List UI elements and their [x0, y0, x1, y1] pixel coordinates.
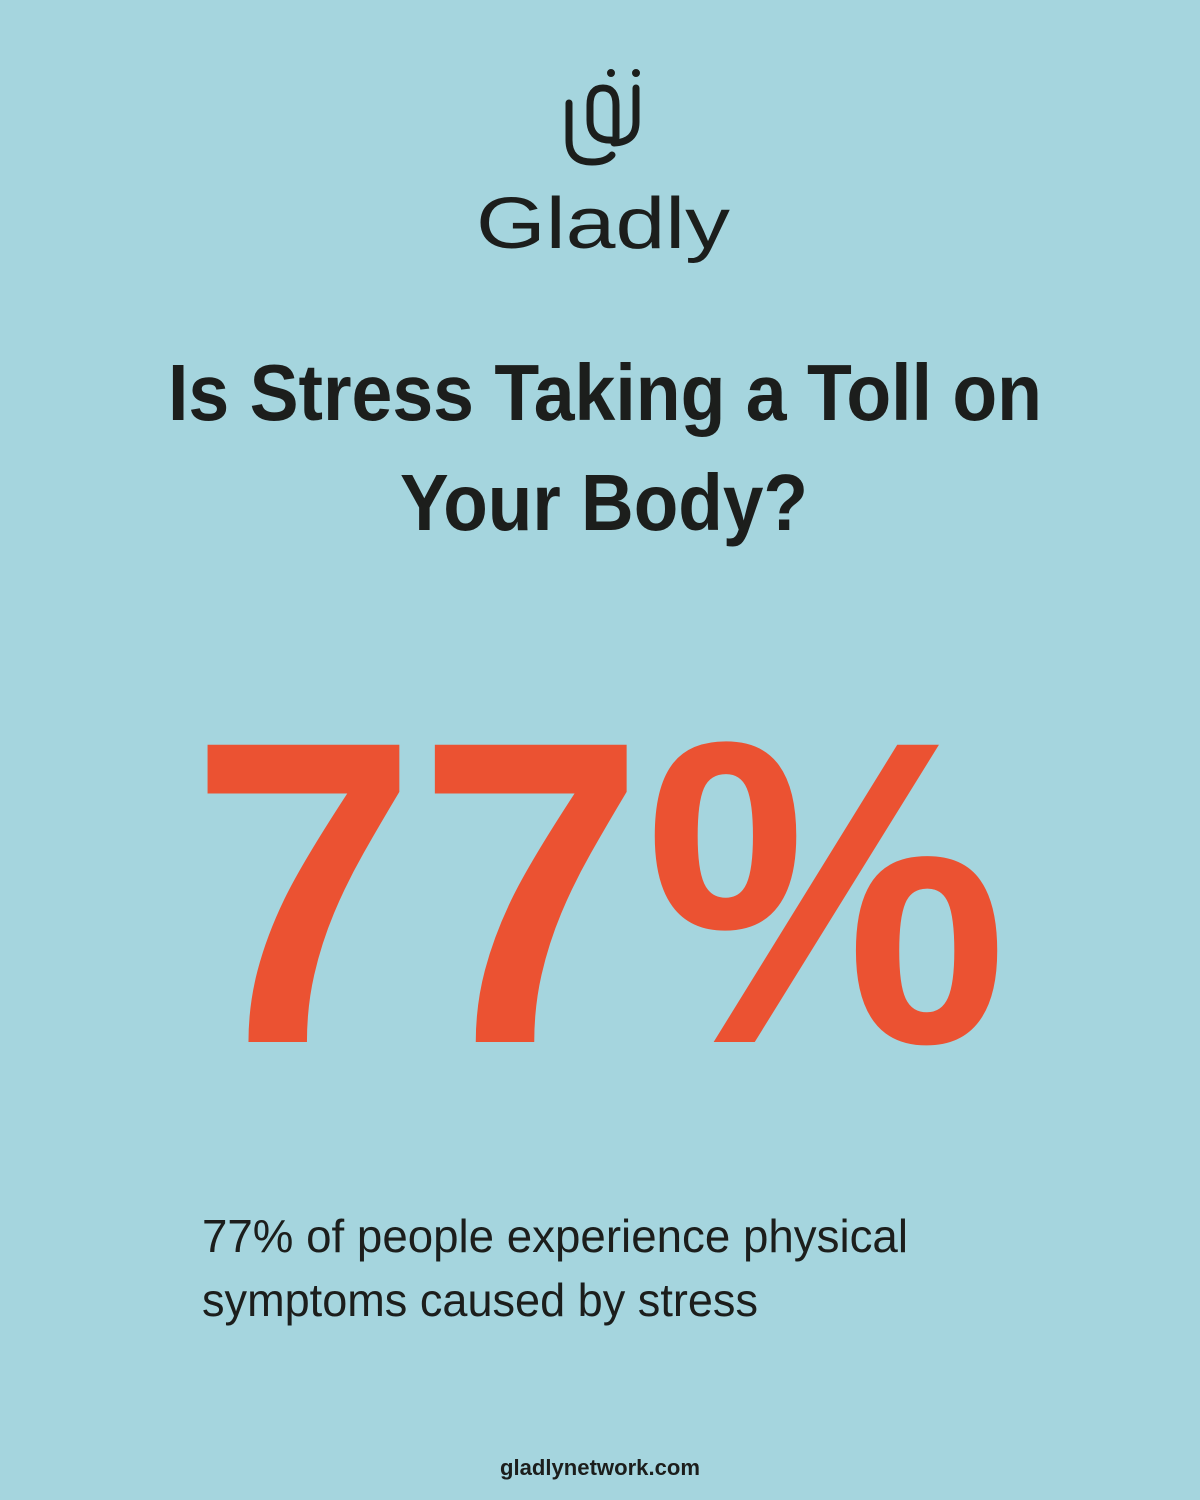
logo wordmark: Gladly [476, 184, 730, 264]
big stat 77%: 77% [190, 651, 1008, 1134]
description: 77% of people experience physical [202, 1210, 908, 1262]
logo icon [569, 70, 639, 162]
description [202, 1210, 908, 1326]
footer url: gladlynetwork.com [500, 1455, 700, 1480]
title: Is Stress Taking a Toll on [168, 348, 1042, 437]
title [168, 348, 1042, 547]
description: symptoms caused by stress [202, 1274, 758, 1326]
title: Your Body? [400, 458, 808, 547]
